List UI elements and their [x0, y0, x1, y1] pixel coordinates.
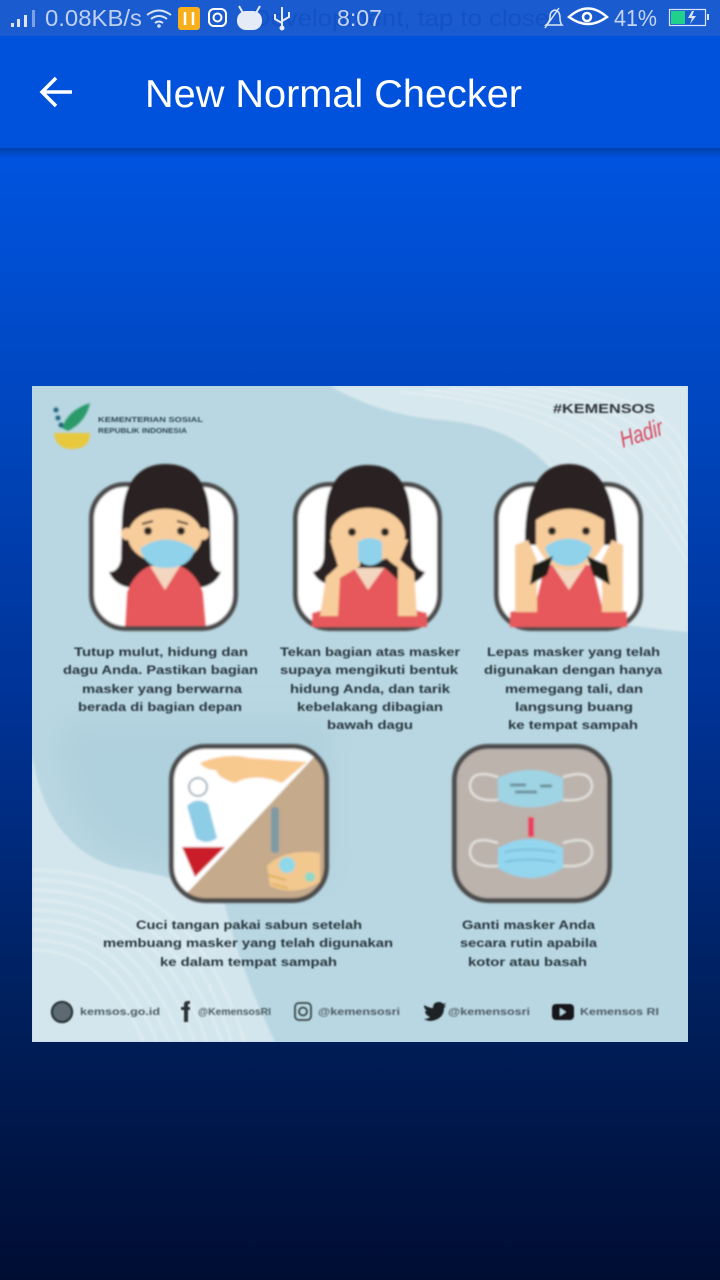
shirt — [125, 566, 206, 626]
caption: step 2: supaya mengikuti bentuk — [280, 663, 458, 677]
caption: step 3: langsung buang — [515, 700, 633, 714]
background wave shapes — [32, 386, 688, 1042]
clock: 8:07 — [337, 5, 382, 31]
app bar — [0, 36, 720, 158]
ministry name: REPUBLIK INDONESIA — [98, 428, 187, 435]
panel: step 4 illustration — [172, 746, 330, 905]
caption: step 1: dagu Anda. Pastikan bagian — [63, 663, 258, 677]
icon: twitter — [424, 1002, 446, 1021]
caption: step 2: Tekan bagian atas masker — [280, 645, 460, 659]
network speed: 0.08KB/s — [45, 5, 142, 31]
left arm and hand — [320, 537, 360, 616]
icon: eye — [569, 8, 607, 24]
caption: step 1: masker yang berwarna — [82, 682, 242, 696]
icon: instagram — [295, 1003, 311, 1020]
caption: step 5 — [460, 918, 597, 969]
hair tufts — [530, 556, 610, 585]
caption: step 2: hidung Anda, dan tarik — [290, 682, 450, 696]
hanging mask — [189, 778, 207, 796]
icon: website globe — [52, 1002, 72, 1022]
hashtag: #KEMENSOS — [553, 401, 655, 416]
eyes — [348, 528, 356, 536]
red bin — [182, 847, 225, 877]
instagram handle: @kemensosri — [318, 1006, 400, 1018]
panel: step 2 illustration — [296, 465, 440, 628]
shirt — [510, 565, 627, 627]
caption: step 3: ke tempat sampah — [508, 718, 638, 732]
caption: step 1: Tutup mulut, hidung dan — [74, 645, 248, 659]
mask — [358, 538, 382, 566]
battery percent: 41% — [614, 5, 657, 31]
footer social links — [52, 1001, 659, 1022]
mask — [140, 540, 195, 568]
icon: tools badge — [178, 7, 200, 30]
hair — [109, 464, 221, 588]
caption: step 2: kebelakang dibagian — [297, 700, 443, 714]
eyes — [548, 527, 556, 535]
icon: youtube — [552, 1004, 574, 1020]
infographic image panel — [32, 386, 688, 1042]
caption: step 4: Cuci tangan pakai sabun setelah — [136, 918, 362, 932]
app title: New Normal Checker — [145, 73, 522, 116]
icon: muted bell — [545, 8, 562, 28]
arms — [515, 540, 623, 612]
red arrow — [528, 817, 534, 837]
twitter handle: @kemensosri — [448, 1006, 530, 1018]
dirty mask — [470, 770, 592, 808]
caption: step 4: membuang masker yang telah digunakan — [103, 936, 393, 950]
hair — [525, 464, 617, 545]
face — [128, 509, 202, 563]
face — [536, 509, 604, 570]
ministry name — [98, 417, 204, 435]
ministry logo — [54, 403, 90, 449]
icon: instagram — [209, 9, 226, 26]
caption: step 1: berada di bagian depan — [78, 700, 242, 714]
caption: step 2 — [280, 645, 460, 732]
caption: step 5: kotor atau basah — [468, 955, 587, 969]
panel: step 1 illustration — [92, 464, 236, 628]
icon: wifi — [147, 10, 171, 27]
icon: battery — [670, 10, 709, 26]
caption: step 3: memegang tali, dan — [505, 682, 643, 696]
icon: android head — [237, 6, 262, 30]
hair — [313, 465, 425, 584]
soap bottle — [271, 807, 279, 853]
caption: step 5: Ganti masker Anda — [462, 918, 595, 932]
panel: step 5 illustration — [454, 746, 610, 900]
website: kemsos.go.id — [80, 1006, 160, 1018]
caption: step 5: secara rutin apabila — [460, 936, 597, 950]
clean mask — [470, 839, 592, 878]
eyes — [142, 521, 188, 524]
caption: step 4 — [103, 918, 393, 969]
caption: step 3 — [484, 645, 662, 732]
caption: step 1 — [63, 645, 258, 714]
face — [331, 508, 405, 562]
shirt — [312, 568, 427, 627]
script word: Hadir — [616, 414, 667, 454]
status bar: Development, tap to close — [252, 5, 549, 31]
caption: step 4: ke dalam tempat sampah — [160, 955, 337, 969]
icon: usb — [275, 7, 289, 30]
hand — [200, 756, 307, 783]
icon: facebook — [181, 1001, 190, 1022]
facebook handle: @KemensosRI — [198, 1006, 271, 1018]
youtube channel: Kemensos RI — [580, 1006, 659, 1018]
tan diagonal — [186, 756, 326, 900]
ministry name: KEMENTERIAN SOSIAL — [98, 417, 204, 424]
washing hands — [267, 852, 320, 891]
mask — [545, 538, 592, 566]
right arm and hand — [386, 538, 416, 577]
status bar — [0, 0, 720, 36]
panel: step 3 illustration — [496, 464, 640, 628]
caption: step 3: Lepas masker yang telah — [487, 645, 660, 659]
caption: step 2: bawah dagu — [327, 718, 413, 732]
icon: signal — [11, 10, 35, 27]
icon: back arrow — [42, 78, 72, 106]
caption: step 3: digunakan dengan hanya — [484, 663, 662, 677]
